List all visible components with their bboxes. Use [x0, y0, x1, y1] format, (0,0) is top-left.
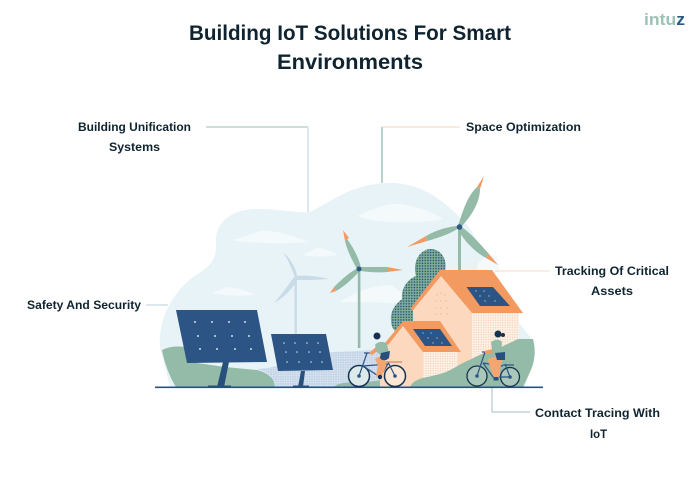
tree: [391, 249, 446, 332]
clouds: [212, 204, 500, 303]
solar panel: large: [176, 310, 267, 388]
title: [189, 22, 511, 74]
label: tracking of critical assets: Assets: [591, 286, 633, 298]
wind turbine: pale: [274, 252, 329, 336]
ground hill: right green: [410, 339, 535, 387]
label: building unification systems: [78, 122, 191, 154]
illustration background blob: [160, 183, 535, 387]
title: Building IoT Solutions For Smart: [189, 22, 511, 45]
label: contact tracing with iot: Contact Tracing With: [535, 408, 660, 420]
ground hill: small green mound: [334, 380, 382, 387]
house: main: [410, 270, 523, 380]
solar panel: small: [271, 334, 333, 388]
wind turbine: middle: [330, 230, 403, 348]
label: tracking of critical assets: [555, 266, 669, 298]
connector: safety and security: [146, 304, 168, 306]
logo: intuz: [644, 10, 685, 29]
house: small: [380, 321, 461, 387]
connector: space optimization: [382, 127, 460, 183]
connector: tracking of critical assets: [495, 270, 550, 272]
ground hill: blue patch: [257, 350, 385, 387]
connector: building unification: [206, 127, 308, 212]
cyclist: right: [467, 330, 520, 386]
label: safety and security: Safety And Security: [27, 300, 142, 312]
label: tracking of critical assets: Tracking Of Critical: [555, 266, 669, 278]
cyclist: left: [348, 332, 406, 386]
label: contact tracing with iot: [535, 408, 660, 441]
ground line: [155, 386, 543, 388]
connector: contact tracing: [492, 387, 530, 412]
wind turbine: large: [407, 176, 498, 273]
label: building unification systems: Building Unification: [78, 122, 191, 134]
label: contact tracing with iot: IoT: [590, 429, 607, 441]
label: space optimization: Space Optimization: [466, 122, 581, 134]
ground hill: left green: [162, 346, 275, 387]
title: Environments: [277, 51, 423, 74]
label: building unification systems: Systems: [109, 142, 160, 154]
